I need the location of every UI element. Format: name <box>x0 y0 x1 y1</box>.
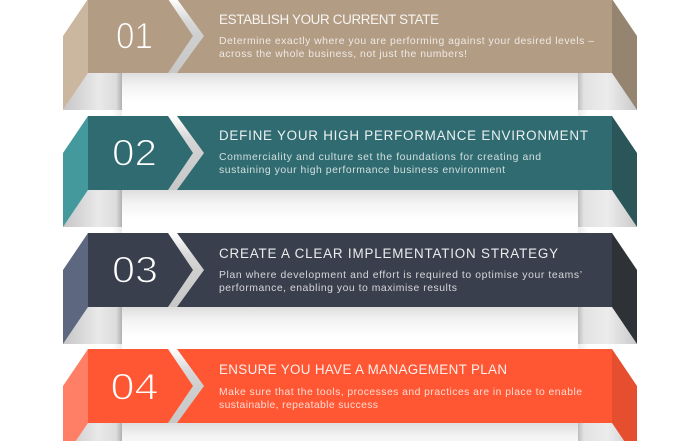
step 2 description <box>219 152 541 176</box>
step 3 description: Plan where development and effort is required to optimise your teams’ <box>219 270 582 281</box>
step 2 panel <box>63 116 637 233</box>
step 2 chevron <box>168 116 204 190</box>
step 4 description: Make sure that the tools, processes and practices are in place to enable <box>219 387 582 398</box>
step 1 description <box>219 36 594 60</box>
step 3 description <box>219 270 582 294</box>
step 4 left fold <box>63 349 88 441</box>
step 4 description <box>219 387 582 411</box>
step 4 ribbon <box>88 349 612 423</box>
step 3 panel <box>63 233 637 349</box>
step 4 chevron <box>168 349 204 423</box>
step 3 ribbon <box>88 233 612 307</box>
step 3 chevron <box>168 233 204 307</box>
step 3 heading: CREATE A CLEAR IMPLEMENTATION STRATEGY <box>219 246 558 261</box>
step 2 number: 02 <box>112 132 157 174</box>
step 2 description: Commerciality and culture set the foundations for creating and <box>219 152 541 163</box>
step 4 number: 04 <box>110 366 158 408</box>
step 3 left fold <box>63 233 88 344</box>
step 4 description: sustainable, repeatable success <box>219 400 378 411</box>
step 2 description: sustaining your high performance business environment <box>219 165 505 176</box>
step 3 right fold <box>612 233 637 344</box>
step 2 under-fold shadow <box>63 190 637 233</box>
step 3 description: performance, enabling you to maximise results <box>219 283 457 294</box>
step 1 chevron <box>168 0 204 73</box>
step 4 right fold <box>612 349 637 441</box>
step 3 number: 03 <box>112 250 158 290</box>
step 2 right fold <box>612 116 637 227</box>
step 2 heading: DEFINE YOUR HIGH PERFORMANCE ENVIRONMENT <box>219 128 588 143</box>
step 1 left fold <box>63 0 88 110</box>
step 4 heading: ENSURE YOU HAVE A MANAGEMENT PLAN <box>219 362 507 377</box>
step 1 ribbon <box>88 0 612 73</box>
step 1 under-fold shadow <box>63 73 637 116</box>
step 1 right fold <box>612 0 637 110</box>
step 2 ribbon <box>88 116 612 190</box>
step 1 number: 01 <box>116 16 153 56</box>
step 4 under-fold shadow <box>63 423 637 441</box>
step 3 under-fold shadow <box>63 307 637 349</box>
step 1 description: Determine exactly where you are performing against your desired levels – <box>219 36 594 47</box>
step 4 panel <box>63 349 637 441</box>
step 1 heading: ESTABLISH YOUR CURRENT STATE <box>219 12 439 27</box>
step 2 left fold <box>63 116 88 227</box>
step 1 panel <box>63 0 637 116</box>
step 1 description: across the whole business, not just the numbers! <box>219 49 467 60</box>
